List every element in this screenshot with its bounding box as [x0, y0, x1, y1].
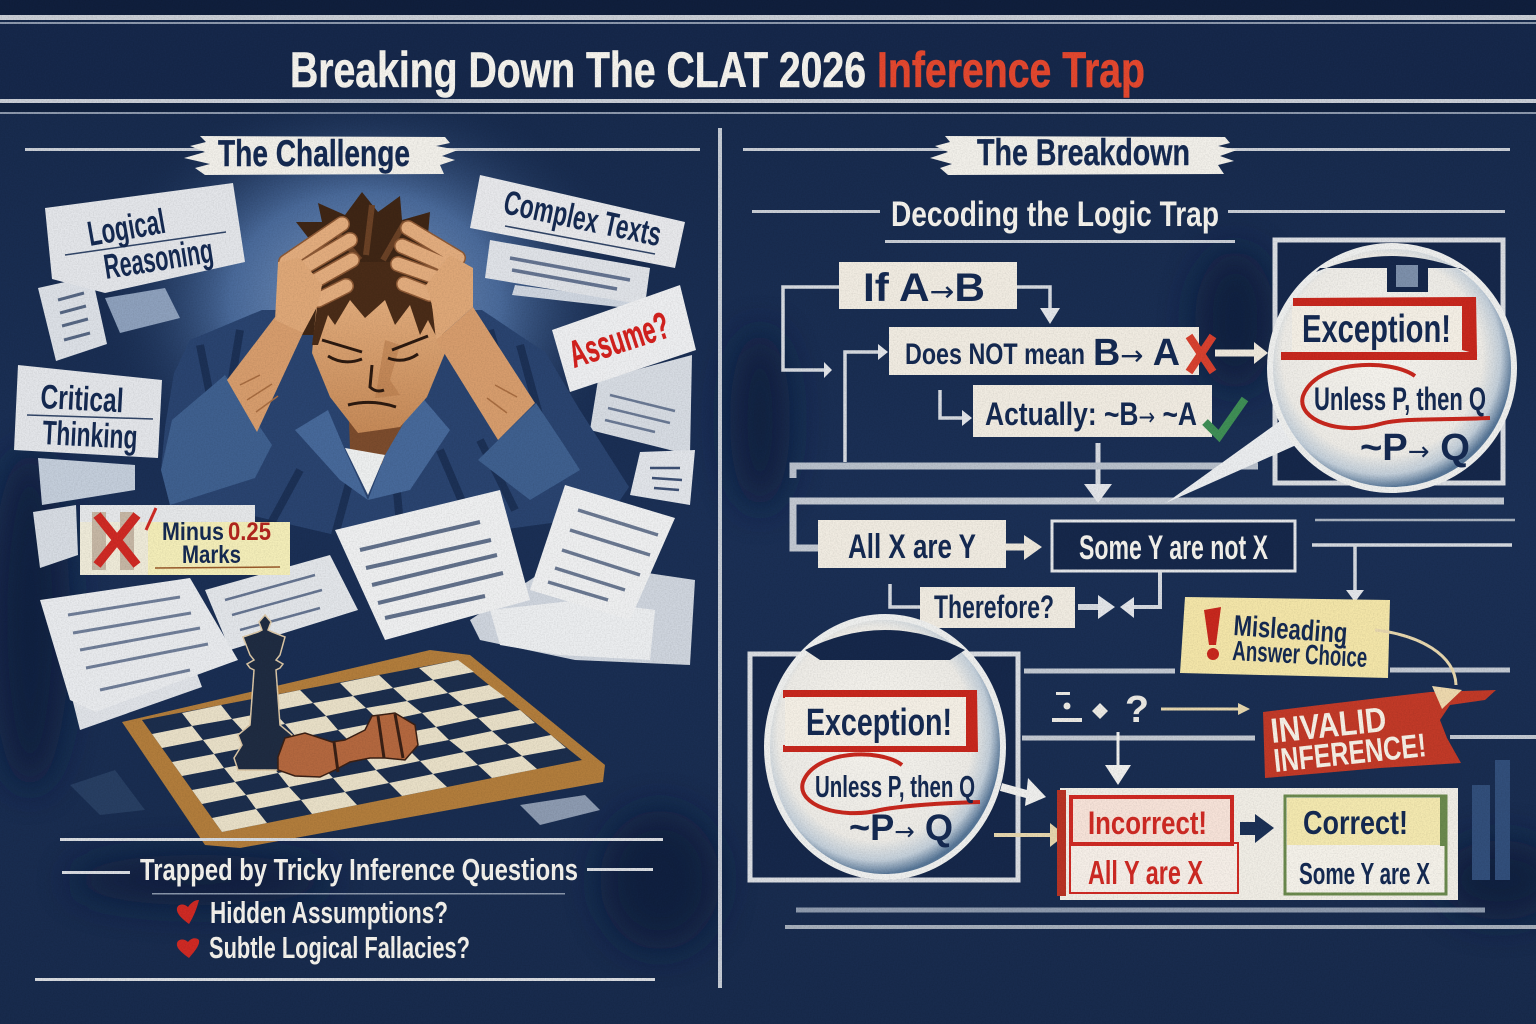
banner: invalid inference: INVALID — [1269, 700, 1388, 751]
magnifier: bottom exception: Unless P, then Q — [815, 769, 975, 804]
note: logical reasoning: Reasoning — [101, 231, 216, 287]
text block: trapped by tricky inference: Trapped by Tricky Inference Questions — [140, 852, 578, 887]
hair fringe — [312, 262, 438, 345]
banner: invalid inference: INFERENCE! — [1272, 726, 1428, 779]
magnifier: bottom exception: Exception! — [806, 702, 952, 744]
callout: misleading answer choice — [1180, 597, 1390, 678]
panel divider — [718, 128, 722, 988]
note: critical thinking — [14, 365, 162, 505]
callout: minus 0.25 marks: Marks — [182, 541, 241, 569]
magnifier: top exception: Exception! — [1302, 308, 1451, 351]
text block: trapped by tricky inference — [35, 838, 663, 981]
note: critical thinking: Critical — [40, 378, 124, 420]
callout: minus 0.25 marks: Minus — [162, 518, 224, 546]
title text: Breaking Down The CLAT 2026 — [290, 42, 866, 98]
result: incorrect — [1070, 797, 1238, 893]
neck and collar — [349, 405, 413, 470]
left forearm — [227, 317, 303, 432]
magnifier: bottom exception — [750, 617, 1018, 880]
icon: red cross — [97, 515, 137, 565]
decorative bars — [1472, 760, 1510, 880]
scattered papers — [33, 450, 695, 730]
right sleeve — [478, 403, 580, 500]
title banner — [0, 0, 1536, 114]
icon: green check — [1205, 399, 1245, 436]
box: actually: Actually: ~B→ ~A — [985, 396, 1197, 432]
icon: heart check 1 — [177, 900, 199, 924]
result: correct: Some Y are X — [1299, 856, 1430, 891]
hair back — [296, 192, 450, 335]
icon: copper king fallen — [278, 713, 418, 777]
result: correct: Correct! — [1303, 804, 1408, 841]
symbols: therefore diamond question: ? — [1125, 689, 1149, 731]
heading: the challenge: The Challenge — [218, 133, 410, 174]
subheading: decoding the logic trap: Decoding the Logic Trap — [891, 195, 1219, 234]
box: some y are not x — [1052, 521, 1295, 571]
symbols: therefore diamond question — [1052, 689, 1149, 731]
arrow: down to results — [1105, 732, 1131, 785]
box: does not mean: Does NOT mean — [905, 338, 1085, 371]
callout: minus 0.25 marks: 0.25 — [228, 518, 271, 546]
subheading: decoding the logic trap — [752, 195, 1505, 243]
note: complex texts — [470, 175, 685, 310]
magnifier: top exception: ~P→ Q — [1360, 427, 1470, 469]
note: complex texts: Complex Texts — [500, 184, 665, 254]
note: logical reasoning: Logical — [85, 202, 168, 254]
icon: heart check 2 — [177, 938, 199, 958]
shirt — [161, 310, 629, 535]
box: therefore: Therefore? — [934, 589, 1054, 625]
magnifier: top exception — [1166, 240, 1514, 503]
box: does not mean — [889, 327, 1213, 375]
box: does not mean: B→ A — [1093, 332, 1180, 374]
box: therefore — [920, 587, 1075, 628]
callout: minus 0.25 marks — [80, 505, 290, 575]
icon: exclamation mark — [1204, 607, 1221, 645]
results panel — [1057, 788, 1458, 900]
heading: the challenge — [25, 133, 700, 175]
note: logical reasoning — [38, 183, 245, 361]
flow connectors: top group — [783, 287, 1536, 927]
box: if a implies b — [839, 262, 1017, 310]
facial features — [322, 336, 428, 407]
text block: trapped by tricky inference: Hidden Assumptions? — [210, 895, 448, 930]
backdrop glow — [95, 85, 635, 515]
panel: the challenge — [14, 85, 700, 981]
note: critical thinking: Thinking — [42, 414, 138, 457]
icon: black king standing — [234, 615, 294, 770]
title highlight: Inference Trap — [877, 42, 1145, 98]
text block: trapped by tricky inference: Subtle Logical Fallacies? — [209, 930, 470, 965]
callout: misleading answer choice: Answer Choice — [1232, 635, 1368, 673]
panel: the breakdown — [743, 132, 1536, 927]
callout: misleading answer choice: Misleading — [1233, 610, 1348, 650]
box: actually — [973, 385, 1245, 437]
background shading — [0, 250, 1536, 950]
magnifier: bottom exception: ~P→ Q — [849, 807, 953, 848]
arrow: curved to invalid — [1375, 630, 1462, 709]
icon: red cross — [1189, 336, 1213, 372]
result: incorrect: Incorrect! — [1088, 805, 1207, 841]
box: if a implies b: If A→B — [863, 266, 985, 310]
right hand — [398, 228, 473, 340]
left sleeve — [161, 375, 272, 505]
heading: the breakdown: The Breakdown — [977, 132, 1190, 173]
arrow: symbols to invalid — [1161, 703, 1250, 715]
heading: the breakdown — [743, 132, 1510, 175]
right forearm — [436, 307, 535, 440]
banner: invalid inference — [1263, 690, 1496, 779]
box: all x are y: All X are Y — [848, 528, 976, 566]
result: incorrect: All Y are X — [1088, 854, 1203, 891]
arrowheads — [824, 308, 1364, 619]
illustration: stressed student — [161, 192, 629, 535]
box: some y are not x: Some Y are not X — [1079, 529, 1268, 567]
arrow: incorrect to correct — [1240, 814, 1274, 843]
left hand — [275, 224, 352, 333]
result: correct — [1285, 796, 1447, 894]
note: assume — [552, 285, 696, 455]
face — [312, 300, 445, 433]
box: all x are y — [818, 520, 1006, 568]
note: assume: Assume? — [564, 305, 675, 377]
arrows: magnifier to results — [994, 778, 1065, 847]
illustration: chess board — [70, 615, 605, 848]
